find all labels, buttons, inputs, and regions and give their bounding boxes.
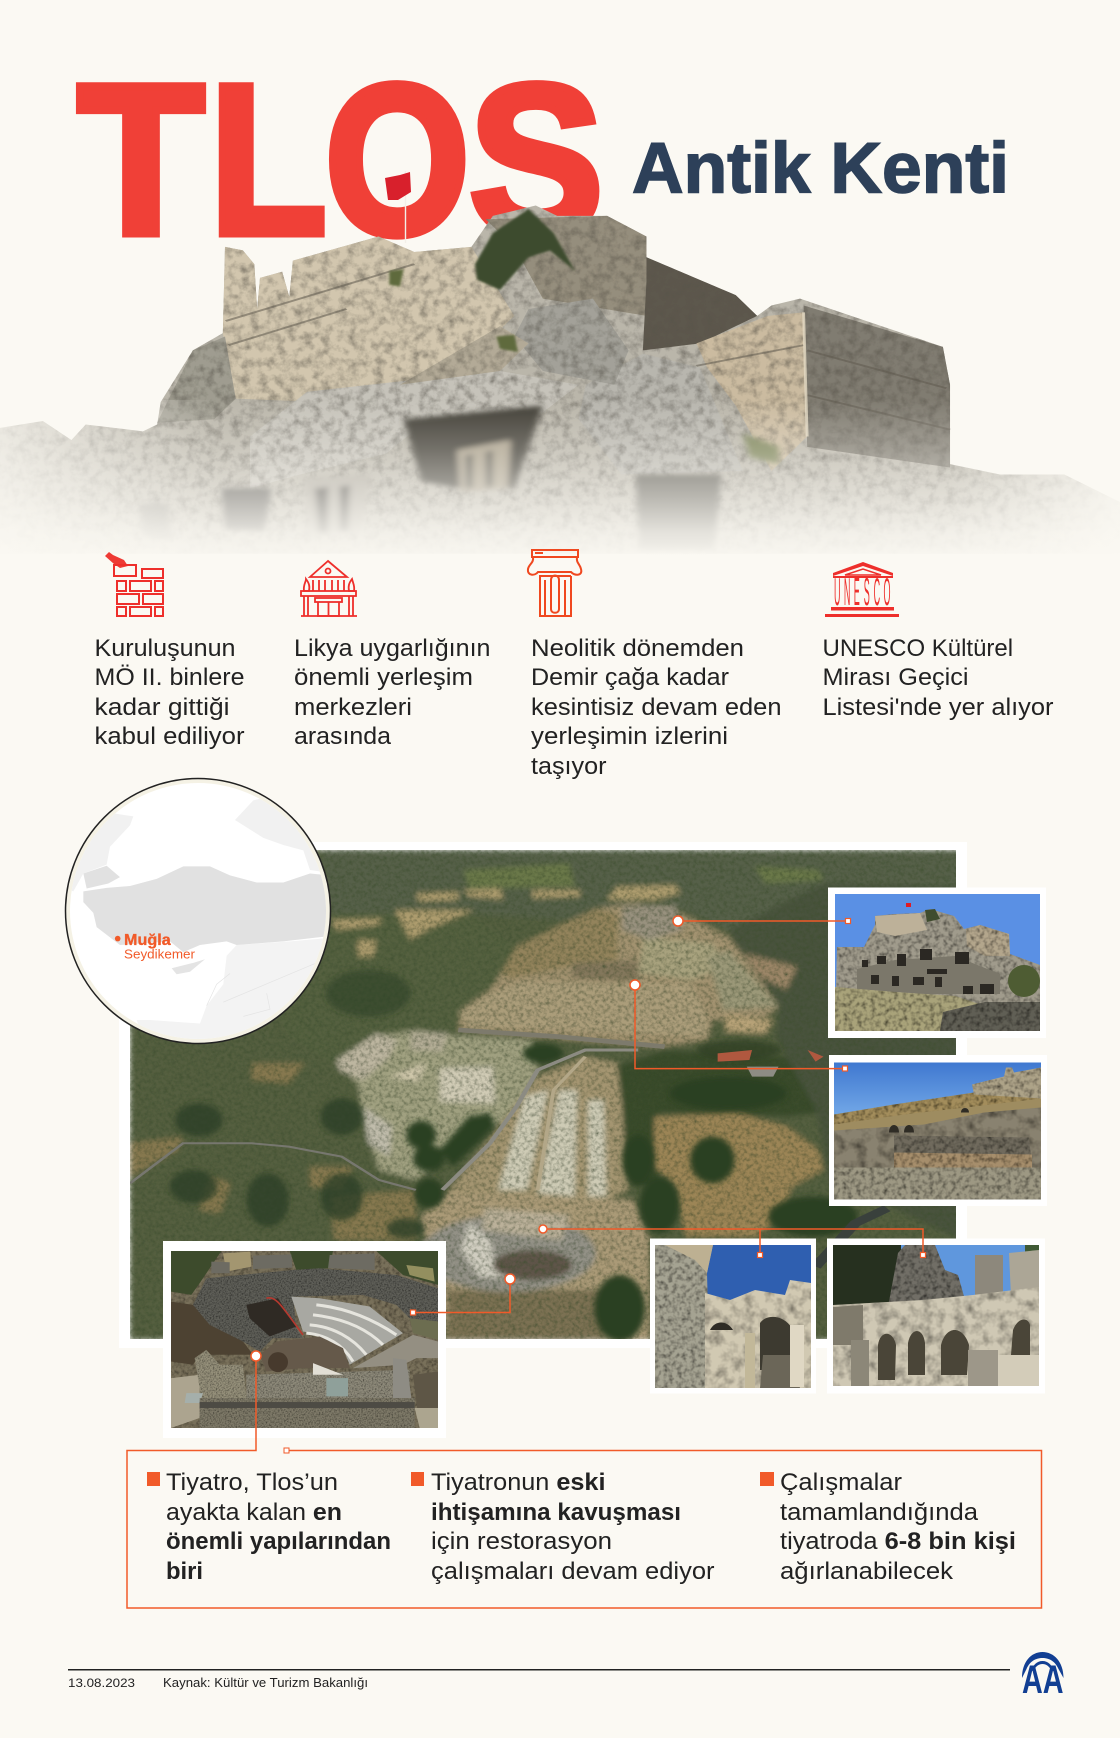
text: UNESCO list: Mirası Geçici bbox=[822, 664, 968, 691]
photo: aerial view bbox=[119, 842, 967, 1348]
text: founding: kadar gittiği bbox=[94, 694, 230, 721]
note 2 bbox=[411, 1469, 715, 1585]
logo: AA bbox=[1022, 1652, 1064, 1702]
flag bbox=[385, 171, 411, 243]
title: TLOS bbox=[78, 40, 604, 280]
text: Neolithic: taşıyor bbox=[531, 753, 606, 780]
connector: castle marker bbox=[673, 916, 850, 926]
footer rule bbox=[68, 1669, 1010, 1670]
text: Neolithic: kesintisiz devam eden bbox=[531, 694, 782, 721]
connector: bath marker bbox=[539, 1225, 926, 1258]
text: Lycian civilization: Likya uygarlığının bbox=[294, 635, 490, 662]
text: Lycian civilization: önemli yerleşim bbox=[294, 664, 473, 691]
text: Neolithic bbox=[531, 635, 782, 780]
text: founding: kabul ediliyor bbox=[94, 723, 245, 750]
footer source: Kaynak: Kültür ve Turizm Bakanlığı bbox=[163, 1676, 368, 1690]
photo: castle and rock tombs bbox=[828, 888, 1046, 1038]
map: location globe bbox=[63, 778, 337, 1049]
photo: stadium bbox=[829, 1055, 1047, 1206]
note 2: için restorasyon bbox=[431, 1528, 612, 1555]
note 3: tamamlandığında bbox=[780, 1499, 979, 1526]
text: UNESCO list: UNESCO Kültürel bbox=[822, 635, 1013, 662]
title: TLOS: T bbox=[78, 40, 204, 280]
note 1: önemli yapılarından bbox=[166, 1528, 391, 1555]
note 3: Çalışmalar bbox=[780, 1469, 902, 1496]
note 1: ayakta kalan en bbox=[166, 1499, 342, 1526]
text: founding: Kuruluşunun bbox=[94, 635, 236, 662]
note 2: Tiyatronun eski bbox=[431, 1469, 606, 1496]
icon: bricks bbox=[105, 552, 163, 616]
panel: key facts bbox=[94, 550, 1054, 780]
note 2: çalışmaları devam ediyor bbox=[431, 1558, 715, 1585]
title: TLOS: O bbox=[325, 40, 470, 280]
panel: theatre notes box bbox=[127, 1351, 1042, 1608]
text: Neolithic: Neolitik dönemden bbox=[531, 635, 744, 662]
footer date: 13.08.2023 bbox=[68, 1676, 135, 1690]
note 1: biri bbox=[166, 1558, 203, 1585]
icon: UNESCO temple bbox=[825, 562, 899, 617]
text: UNESCO list bbox=[822, 635, 1054, 721]
subtitle: Antik Kenti: Antik Kenti bbox=[632, 130, 1009, 208]
photo: bath ruins bbox=[827, 1238, 1045, 1394]
text: Neolithic: Demir çağa kadar bbox=[531, 664, 729, 691]
label: Muğla: Seydikemer bbox=[124, 947, 196, 962]
photo: inscribed wall bbox=[650, 1238, 816, 1394]
icon: temple building bbox=[301, 561, 357, 616]
text: Lycian civilization: merkezleri bbox=[294, 694, 412, 721]
icon: UNESCO temple: UNESCO bbox=[834, 569, 891, 613]
text: UNESCO list: Listesi'nde yer alıyor bbox=[822, 694, 1054, 721]
title: TLOS: L bbox=[210, 40, 327, 280]
text: founding: MÖ II. binlere bbox=[94, 664, 244, 691]
logo: AA: AA bbox=[1022, 1658, 1064, 1702]
icon: ionic column bbox=[528, 550, 581, 616]
text: Neolithic: yerleşimin izlerini bbox=[531, 723, 728, 750]
connector: stadium marker bbox=[630, 980, 848, 1071]
note 3: tiyatroda 6-8 bin kişi bbox=[780, 1528, 1016, 1555]
text: founding bbox=[94, 635, 245, 750]
text: Lycian civilization: arasında bbox=[294, 723, 392, 750]
note 1 bbox=[147, 1469, 391, 1585]
label: Muğla: Muğla bbox=[124, 932, 171, 949]
photo: theatre bbox=[163, 1241, 446, 1438]
note 2: ihtişamına kavuşması bbox=[431, 1499, 681, 1526]
text: Lycian civilization bbox=[294, 635, 490, 750]
note 3 bbox=[760, 1469, 1016, 1585]
note 3: ağırlanabilecek bbox=[780, 1558, 954, 1585]
title: TLOS: S bbox=[469, 40, 604, 280]
connector: theatre detail to aerial bbox=[410, 1274, 515, 1315]
note 1: Tiyatro, Tlos’un bbox=[166, 1469, 338, 1496]
photo: Tlos castle rock with fade bbox=[0, 171, 1120, 565]
label: Muğla bbox=[115, 932, 196, 962]
